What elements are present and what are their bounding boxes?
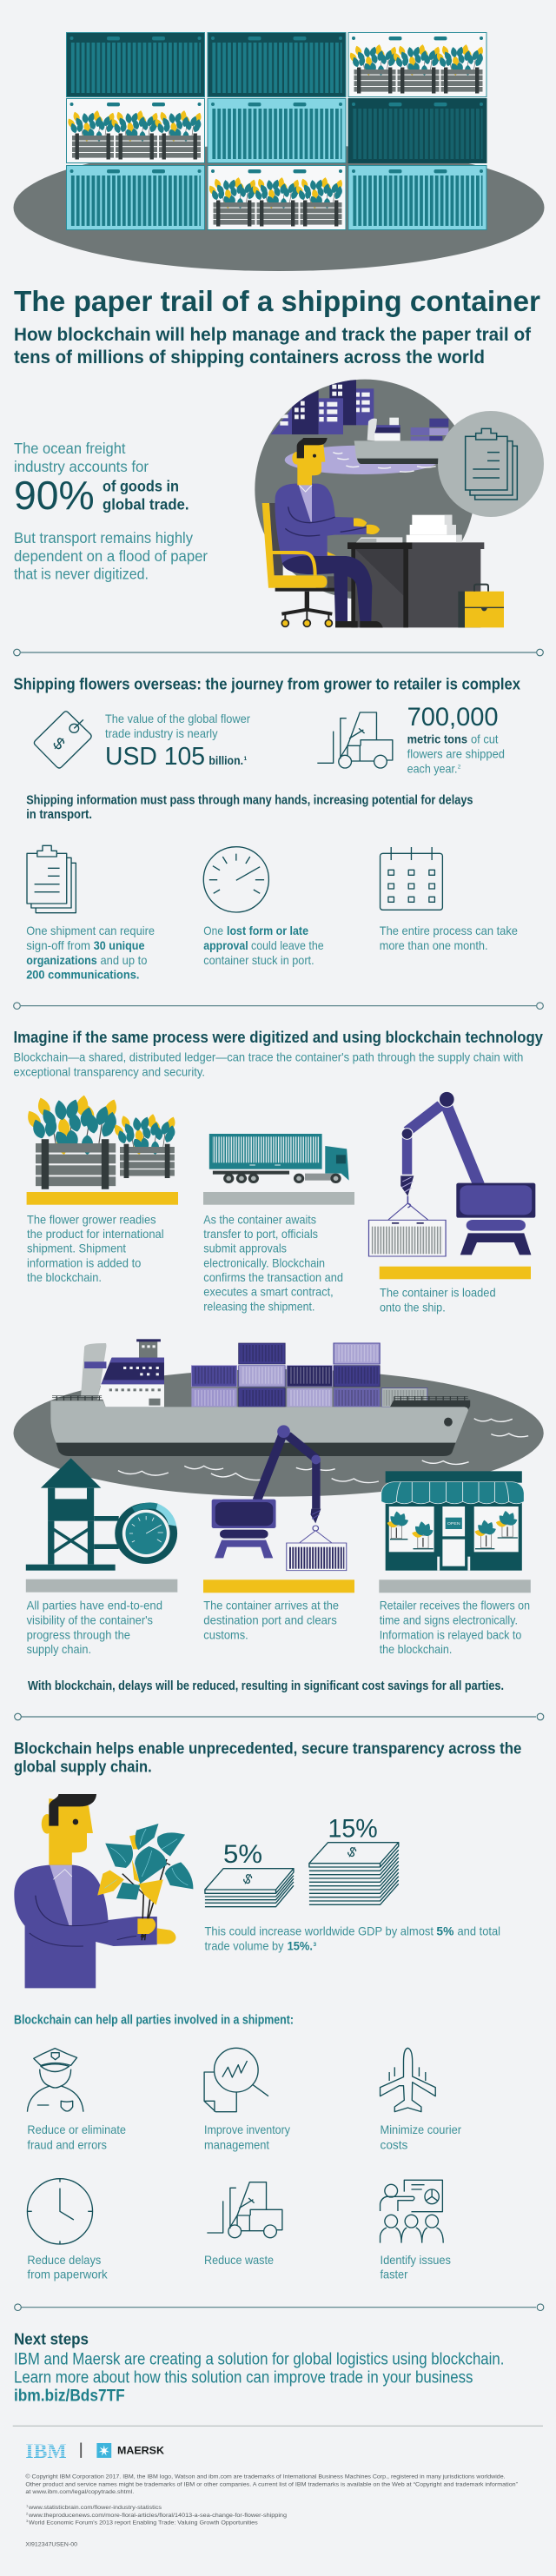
text: inventory: management: [204, 2137, 269, 2151]
text: waste: Reduce waste: [204, 2253, 274, 2267]
icon: 15% stack of money: [309, 1814, 399, 1904]
text: lost form: lost form or late: [227, 924, 308, 937]
stat: ocean freight 90%: that is never digitized.: [14, 566, 149, 583]
city buildings: [271, 380, 374, 434]
text: flower grower: shipment. Shipment: [27, 1242, 126, 1255]
illustration: watchtower with gauge: [26, 1458, 177, 1571]
text: paperwork: from paperwork: [27, 2268, 109, 2281]
illustration: container ship at sea: [14, 1339, 544, 1509]
suit: [14, 1865, 157, 1988]
callout: many hands: [26, 793, 473, 822]
text: awaiting transfer: confirms the transaction and: [203, 1270, 343, 1284]
stat: 700,000 metric tons: [407, 703, 505, 775]
text: lost form: [203, 924, 324, 967]
callout: cost savings: With blockchain, delays will be reduced, resulting in significant cost savings for all parties.: [28, 1679, 504, 1693]
office chair: [262, 503, 354, 626]
text: end-to-end visibility: supply chain.: [27, 1642, 91, 1656]
text: issues: Identify issues: [381, 2253, 451, 2267]
text: fraud: [27, 2122, 126, 2151]
text: awaiting transfer: [203, 1212, 343, 1313]
bar: step 1: [27, 1192, 178, 1205]
stat: ocean freight 90%: dependent on a flood of paper: [14, 547, 208, 565]
gauge: [115, 1502, 177, 1564]
text: entire process: The entire process can take: [380, 924, 518, 937]
icon: airplane: [381, 2048, 435, 2112]
subtitle: How blockchain will help manage and track the paper trail of: [14, 325, 532, 345]
text: inventory: Improve inventory: [204, 2122, 290, 2136]
text: sign-off: 30 unique: [94, 938, 145, 952]
seated man: [268, 438, 383, 627]
text: container loaded: The container is loaded: [380, 1286, 496, 1300]
logo: Maersk: MAERSK: [117, 2444, 164, 2456]
illustration: flower shop: [381, 1471, 524, 1571]
text: sign-off: 200 communications.: [26, 968, 139, 982]
footnotes: 2: [26, 2511, 29, 2516]
section heading: unprecedented transparency: [14, 1738, 521, 1775]
text: fraud: fraud and errors: [27, 2137, 107, 2151]
text: sign-off: [26, 924, 155, 982]
text: next steps call to action: ibm.biz/Bds7TF: [14, 2387, 125, 2405]
text: GDP increase: trade volume by: [205, 1939, 283, 1953]
illustration: office worker at desk with city and ship: [255, 380, 544, 627]
text: awaiting transfer: As the container awaits: [203, 1212, 316, 1226]
heading: next steps: Next steps: [14, 2330, 89, 2348]
section heading: shipping flowers overseas: Shipping flowers overseas: the journey from grower to retailer is complex: [14, 675, 520, 692]
illustration: flower crates: [24, 1095, 177, 1189]
text: issues: [381, 2253, 451, 2281]
intro paragraph: blockchain: exceptional transparency and security.: [14, 1064, 205, 1078]
stat: value of flower trade: The value of the global flower: [105, 712, 250, 725]
text: arrives at port: The container arrives at the: [203, 1599, 339, 1612]
icon: 5% stack of money: $: [241, 1871, 255, 1888]
icon: gauge clock: [203, 847, 268, 912]
text: arrives at port: [203, 1599, 339, 1641]
text: sign-off: organizations: [26, 953, 97, 967]
text: GDP increase: [205, 1924, 500, 1953]
ship: [354, 418, 448, 464]
superstructure and cargo: [81, 1339, 427, 1407]
magnified clipboard circle: [438, 411, 544, 517]
title: The paper trail of a shipping container: [14, 285, 540, 317]
text: courier: costs: [381, 2137, 407, 2151]
stat: value of flower trade: billion.: [208, 753, 243, 767]
hands: [137, 1918, 156, 1934]
stat: 700,000 metric tons: of cut: [471, 732, 499, 746]
logo: Maersk: [96, 2443, 164, 2458]
icon: 5% stack of money: 5%: [223, 1840, 262, 1869]
text: lost form: approval: [203, 938, 248, 952]
illustration: crane loading container: [368, 1091, 535, 1256]
footnotes: [26, 2504, 287, 2526]
icon: forklift: [207, 2182, 282, 2238]
text: end-to-end visibility: progress through the: [27, 1627, 130, 1641]
sea ellipse: [14, 1369, 544, 1497]
bar: step 2: [203, 1192, 354, 1205]
text: awaiting transfer: electronically. Blockchain: [203, 1255, 325, 1269]
stat: ocean freight 90%: of goods in: [103, 478, 179, 495]
text: flower grower: the product for international: [27, 1227, 164, 1241]
icon: 15% stack of money: 15%: [328, 1814, 378, 1843]
legal text: at www.ibm.com/legal/copytrade.shtml.: [25, 2489, 134, 2495]
subheading: all parties: Blockchain can help all parties involved in a shipment:: [14, 2013, 294, 2027]
text: arrives at port: destination port and clears: [203, 1613, 337, 1627]
text: sign-off: and up to: [101, 953, 148, 967]
text: fraud: Reduce or eliminate: [27, 2122, 126, 2136]
text: GDP increase: 5%: [436, 1924, 454, 1938]
stat: value of flower trade: USD 105: [105, 743, 205, 771]
icon: magnifier on document: [204, 2048, 268, 2112]
section heading: unprecedented transparency: Blockchain helps enable unprecedented, secure transparency across the: [14, 1738, 521, 1757]
text: flower grower: The flower grower readies: [27, 1212, 156, 1226]
text: end-to-end visibility: All parties have end-to-end: [27, 1599, 162, 1612]
text: next steps call to action: Learn more about how this solution can improve trade in your business: [14, 2369, 473, 2387]
text: flower grower: information is added to: [27, 1255, 142, 1269]
text: GDP increase: This could increase worldwide GDP by almost: [205, 1924, 434, 1938]
text: retailer receives: Retailer receives the flowers on: [380, 1599, 530, 1612]
text: retailer receives: the blockchain.: [380, 1642, 452, 1656]
text: end-to-end visibility: [27, 1599, 162, 1656]
icon: clock: [27, 2179, 93, 2244]
stat: ocean freight 90%: global trade.: [103, 496, 189, 513]
section heading: unprecedented transparency: global supply chain.: [14, 1757, 152, 1775]
illustration: man holding plant: [14, 1794, 193, 1988]
stat: ocean freight 90%: industry accounts for: [14, 458, 149, 475]
stat: 700,000 metric tons: each year.: [407, 761, 457, 775]
text: awaiting transfer: releasing the shipment.: [203, 1299, 314, 1313]
text: lost form: could leave the: [251, 938, 324, 952]
footnotes: 1: [26, 2504, 29, 2507]
text: end-to-end visibility: visibility of the container's: [27, 1613, 153, 1627]
text: inventory: [204, 2122, 290, 2151]
legal text: [25, 2473, 519, 2495]
text: GDP increase: 3: [313, 1942, 316, 1948]
legal text: © Copyright IBM Corporation 2017. IBM, the IBM logo, Watson and ibm.com are trademarks of International Business Machines Corp., registered in many jurisdictions worldwide.: [25, 2473, 506, 2480]
stat: 700,000 metric tons: flowers are shipped: [407, 746, 505, 760]
text: retailer receives: time and signs electronically.: [380, 1613, 518, 1627]
stat: 700,000 metric tons: 2: [458, 765, 461, 770]
footnotes: www.statisticbrain.com/flower-industry-statistics: [28, 2505, 162, 2511]
stat: ocean freight 90%: 90%: [14, 473, 95, 518]
illustration: container truck: [209, 1134, 349, 1183]
callout: many hands: Shipping information must pass through many hands, increasing potential for delays: [26, 793, 473, 807]
crane arm: [257, 1425, 321, 1509]
text: sign-off: sign-off from: [26, 938, 90, 952]
text: entire process: [380, 924, 518, 952]
head: [49, 1798, 93, 1865]
illustration: lower crane with container: [212, 1500, 347, 1571]
stat: value of flower trade: trade industry is nearly: [105, 726, 218, 740]
shop sign text: OPEN: [447, 1521, 460, 1526]
stat: ocean freight 90%: [14, 440, 208, 583]
text: sign-off: One shipment can require: [26, 924, 155, 937]
stat: ocean freight 90%: The ocean freight: [14, 440, 126, 457]
text: awaiting transfer: submit approvals: [203, 1242, 287, 1255]
text: flower grower: the blockchain.: [27, 1270, 102, 1284]
text: GDP increase: and total: [457, 1924, 500, 1938]
icon: police officer: [27, 2049, 83, 2112]
icon: 15% stack of money: $: [345, 1844, 359, 1861]
text: courier: Minimize courier: [381, 2122, 461, 2136]
plant: [97, 1824, 193, 1940]
text: lost form: One: [203, 924, 223, 937]
stat: 700,000 metric tons: metric tons: [407, 732, 467, 746]
footnotes: 3: [26, 2519, 29, 2523]
text: entire process: more than one month.: [380, 938, 488, 952]
platform ellipse: [14, 144, 544, 271]
text: paperwork: Reduce delays: [27, 2253, 101, 2267]
document code: XI912347USEN-00: [25, 2542, 77, 2548]
container grid: [66, 33, 486, 229]
text: awaiting transfer: executes a smart contract,: [203, 1285, 334, 1299]
icon: presenter and audience: [381, 2180, 443, 2243]
intro paragraph: blockchain: Blockchain—a shared, distributed ledger—can trace the container's path through the supply chain with: [14, 1050, 523, 1063]
callout: many hands: in transport.: [26, 808, 92, 822]
text: GDP increase: 15%.: [288, 1939, 313, 1953]
subtitle: tens of millions of shipping containers across the world: [14, 348, 485, 368]
text: paperwork: [27, 2253, 109, 2281]
desk, papers and briefcase: [348, 515, 504, 627]
hull: [390, 1401, 470, 1411]
stat: value of flower trade: 1: [243, 756, 247, 762]
icon: price tag: [34, 712, 91, 768]
text: issues: faster: [381, 2268, 408, 2281]
icon: calendar: [381, 847, 442, 910]
text: next steps call to action: [14, 2351, 504, 2405]
stat: ocean freight 90%: But transport remains highly: [14, 529, 193, 546]
cargo containers: [191, 1343, 427, 1407]
icon: clipboard: [27, 845, 76, 913]
stat: value of flower trade: [105, 712, 250, 771]
waves: [118, 1419, 528, 1483]
footnotes: www.theproducenews.com/more-floral-articles/floral/14013-a-sea-change-for-flower-shipping: [28, 2513, 287, 2519]
hero: stacked shipping containers: [14, 33, 544, 271]
text: retailer receives: Information is relayed back to: [380, 1627, 522, 1641]
stat: 700,000 metric tons: 700,000: [407, 703, 499, 732]
icon: 5% stack of money: [205, 1840, 294, 1907]
footnotes: World Economic Forum's 2013 report Enabling Trade: Valuing Growth Opportunities: [29, 2520, 258, 2526]
water: [285, 446, 440, 474]
text: container loaded: [380, 1286, 496, 1314]
intro paragraph: blockchain: [14, 1050, 523, 1078]
bar: step 5: [203, 1579, 354, 1593]
text: flower grower: [27, 1212, 164, 1284]
text: container loaded: onto the ship.: [380, 1300, 446, 1314]
logo: IBM: IBM: [25, 2440, 67, 2463]
icon: price tag: $: [50, 734, 68, 754]
text: awaiting transfer: transfer to port, officials: [203, 1227, 318, 1241]
text: lost form: container stuck in port.: [203, 953, 314, 967]
legal text: Other product and service names might be trademarks of IBM or other companies. A current list of IBM trademarks is available on the Web at “Copyright and trademark information”: [25, 2481, 519, 2487]
text: next steps call to action: IBM and Maersk are creating a solution for global logistics using blockchain.: [14, 2351, 504, 2369]
subtitle: [14, 325, 532, 368]
text: courier: [381, 2122, 461, 2151]
icon: forklift: [317, 712, 393, 768]
bar: step 4: [26, 1579, 177, 1593]
text: arrives at port: customs.: [203, 1627, 248, 1641]
bar: step 3: [380, 1267, 531, 1279]
text: retailer receives: [380, 1599, 530, 1656]
awning: [381, 1482, 524, 1504]
bar: step 6: [379, 1579, 531, 1593]
